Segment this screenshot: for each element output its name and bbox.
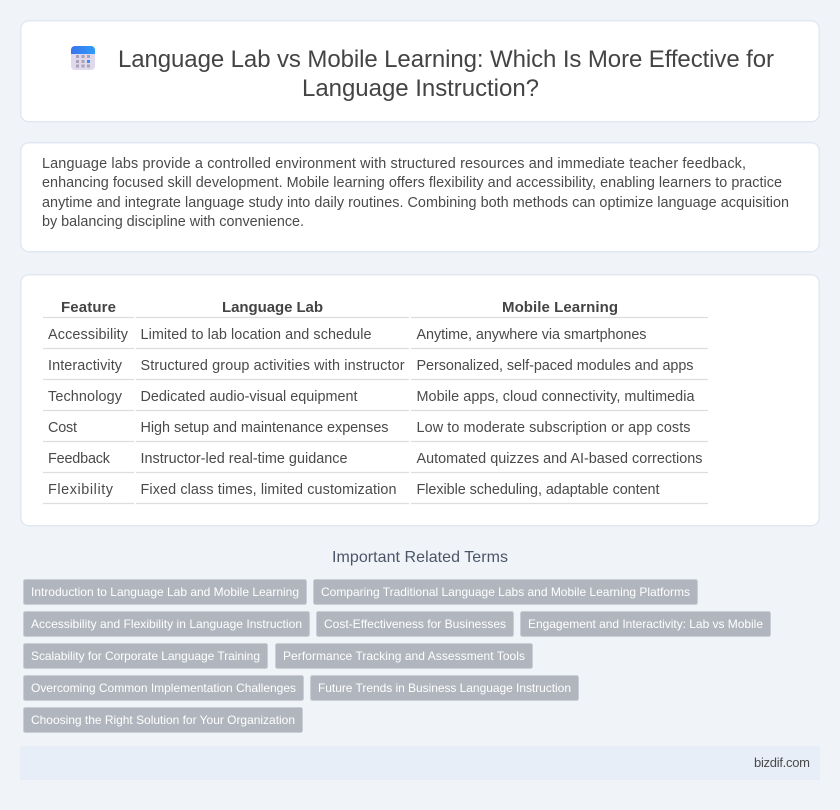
tag [316, 612, 514, 636]
table header: Mobile Learning [502, 299, 618, 316]
row: flexibility: Flexible scheduling, adaptable content [416, 482, 660, 498]
title [118, 46, 774, 102]
tag: Accessibility and Flexibility in Language Instruction [31, 617, 302, 631]
tag: Choosing the Right Solution for Your Organization [31, 713, 295, 727]
table header: Feature [61, 299, 116, 316]
table header [61, 299, 618, 316]
row: flexibility: Fixed class times, limited customization [140, 482, 396, 498]
tag: Scalability for Corporate Language Training [31, 649, 260, 663]
row: interactivity: Interactivity [48, 358, 123, 374]
intro text: enhancing focused skill development. Mobile learning offers flexibility and accessibility, enabling learners to practice [42, 175, 782, 191]
tag: Performance Tracking and Assessment Tools [283, 649, 525, 663]
row: flexibility: Flexibility [48, 482, 114, 498]
panel: header [21, 21, 819, 122]
intro text: anytime and integrate language study into daily routines. Combining both methods can optimize language acquisition [42, 195, 789, 211]
tag: Engagement and Interactivity: Lab vs Mobile [528, 617, 763, 631]
intro text: by balancing discipline with convenience. [42, 214, 304, 230]
intro text: Language labs provide a controlled environment with structured resources and immediate teacher feedback, [42, 156, 746, 172]
row: interactivity: Structured group activities with instructor [140, 358, 405, 374]
title: Language Instruction? [302, 75, 539, 102]
row: feedback: Instructor-led real-time guidance [140, 451, 348, 467]
tag: Future Trends in Business Language Instruction [318, 681, 571, 695]
intro text [42, 156, 789, 230]
heading: related terms: Important Related Terms [332, 549, 508, 566]
tag [24, 644, 268, 668]
row: cost: High setup and maintenance expenses [140, 420, 388, 436]
row: feedback [48, 451, 702, 467]
row: feedback: Feedback [48, 451, 111, 467]
tag: Introduction to Language Lab and Mobile Learning [31, 585, 299, 599]
panel: related term tags [24, 580, 770, 732]
tag: Comparing Traditional Language Labs and Mobile Learning Platforms [321, 585, 690, 599]
row: cost [48, 420, 690, 436]
row: technology: Technology [48, 389, 123, 405]
row: technology: Mobile apps, cloud connectivity, multimedia [416, 389, 694, 405]
footer: bizdif.com [754, 755, 810, 770]
row: technology [48, 389, 694, 405]
row: flexibility [48, 482, 660, 498]
row: cost: Cost [48, 420, 77, 436]
row: accessibility: Limited to lab location and schedule [140, 327, 372, 343]
tag [276, 644, 532, 668]
tag [24, 676, 304, 700]
panel: comparison table [21, 275, 819, 526]
footer [20, 746, 820, 780]
icon: calendar [71, 46, 95, 70]
title: Language Lab vs Mobile Learning: Which Is More Effective for [118, 46, 774, 73]
row: cost: Low to moderate subscription or app costs [416, 420, 690, 436]
tag: Cost-Effectiveness for Businesses [324, 617, 506, 631]
table header: Language Lab [222, 299, 323, 316]
tag [24, 708, 302, 732]
row: interactivity: Personalized, self-paced modules and apps [416, 358, 694, 374]
row: accessibility: Anytime, anywhere via smartphones [416, 327, 646, 343]
row: technology: Dedicated audio-visual equipment [140, 389, 358, 405]
tag [314, 580, 698, 604]
tag: Overcoming Common Implementation Challenges [31, 681, 296, 695]
tag [310, 676, 578, 700]
row: interactivity [48, 358, 694, 374]
row: feedback: Automated quizzes and AI-based corrections [416, 451, 702, 467]
tag [24, 612, 310, 636]
tag [24, 580, 306, 604]
panel: intro [21, 143, 819, 252]
row: accessibility [48, 327, 646, 343]
tag [520, 612, 770, 636]
row: accessibility: Accessibility [48, 327, 129, 343]
